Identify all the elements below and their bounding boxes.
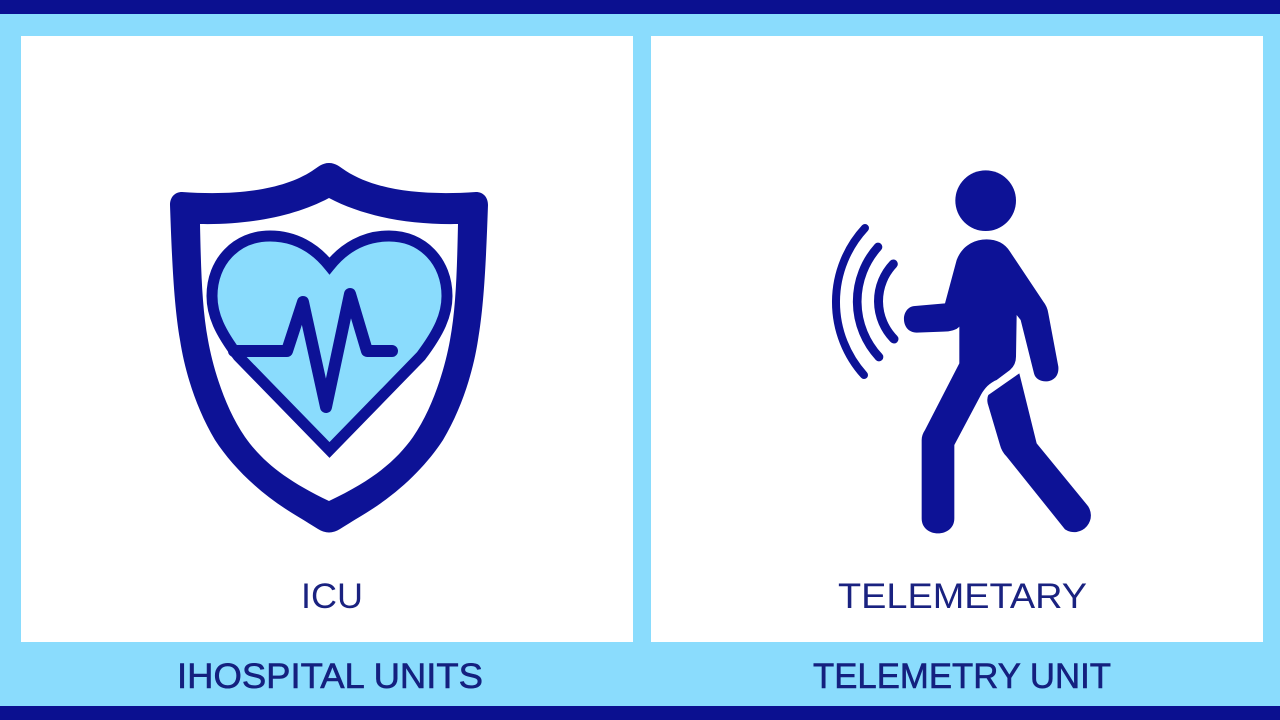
bottom navy bar <box>0 706 1280 720</box>
head <box>955 170 1016 231</box>
heading: telemetry unit: TELEMETRY UNIT <box>813 657 1111 696</box>
top navy bar <box>0 0 1280 14</box>
torso, arms and front leg <box>904 239 1058 533</box>
heart <box>212 236 447 450</box>
icon: walking person with signal waves <box>836 170 1091 533</box>
label: Telemetary: TELEMETARY <box>838 577 1087 616</box>
icon: shield with heart and pulse <box>170 163 488 532</box>
heading: hospital units: IHOSPITAL UNITS <box>177 657 483 696</box>
panel: Telemetary <box>651 36 1263 642</box>
rear leg <box>987 373 1091 532</box>
pulse line <box>234 294 392 407</box>
shield outline <box>170 163 488 532</box>
label: ICU: ICU <box>301 577 363 616</box>
signal waves <box>836 228 894 375</box>
panel: ICU <box>21 36 633 642</box>
